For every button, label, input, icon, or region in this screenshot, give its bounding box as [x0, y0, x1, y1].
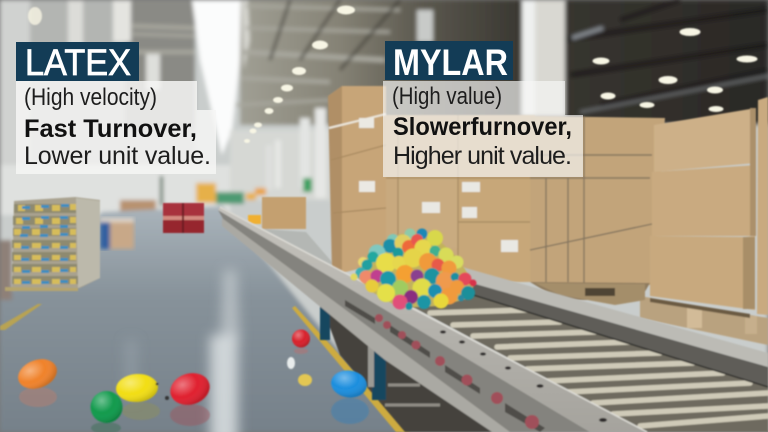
left pallet stack: [5, 197, 100, 291]
cardboard box on far conveyor: [248, 197, 306, 229]
edge box stack: [757, 97, 768, 315]
pallets: [535, 283, 768, 345]
balloon reflections on floor: [19, 348, 369, 432]
beams: [132, 6, 400, 105]
latex text backing: [16, 81, 216, 174]
rollers: [430, 310, 768, 426]
far conveyor section: [218, 206, 332, 285]
aisle floor reflections and markings: [125, 270, 240, 432]
latex heading: LATEX: [25, 42, 131, 83]
balloon: blue: [329, 368, 369, 400]
front box stack: [650, 108, 756, 310]
far side rail: [430, 258, 768, 367]
box stack 1: [328, 86, 386, 275]
mylar subtitle: (High value): [392, 83, 502, 110]
back wall: [230, 130, 330, 200]
balloon: orange: [14, 354, 61, 394]
floor: [0, 206, 405, 432]
yellow floor line: [0, 304, 410, 432]
red crates: [163, 203, 204, 233]
panel: latex: [16, 42, 216, 174]
mylar bold line: Slowerfurnover,: [393, 113, 572, 141]
balloon: yellow: [115, 373, 159, 403]
box stack 3 wrapped in film: [530, 116, 665, 300]
side panel brackets: [345, 300, 545, 432]
near side panel: [218, 210, 590, 432]
balloon: red: [165, 368, 214, 410]
near rail: [218, 207, 647, 432]
balloon pile on conveyor: [350, 228, 476, 310]
balloon: green: [90, 391, 122, 423]
reflection spots on floor: [287, 357, 312, 386]
latex heading bar: [16, 42, 139, 81]
stacked cardboard boxes behind the conveyor: [328, 86, 768, 345]
latex bold line: Fast Turnover,: [24, 115, 197, 143]
roller conveyor: [218, 207, 768, 432]
box stack 2: [385, 115, 535, 282]
far objects: [196, 183, 216, 203]
balloon: small red: [292, 330, 310, 348]
mylar text backing: [383, 81, 583, 177]
latex subtitle: (High velocity): [24, 84, 157, 111]
roller bed: [400, 288, 768, 432]
mylar value line: Higher unit value.: [393, 142, 572, 170]
panel: mylar: [383, 41, 583, 177]
mylar heading bar: [385, 41, 513, 80]
mylar heading: MYLAR: [393, 42, 508, 83]
latex value line: Lower unit value.: [24, 142, 211, 170]
far boxes and pallet stack: [100, 218, 134, 249]
ceiling lights: [28, 6, 758, 143]
under-conveyor shadows: [320, 300, 510, 432]
side fittings: [375, 314, 539, 429]
rail holes: [440, 330, 607, 422]
